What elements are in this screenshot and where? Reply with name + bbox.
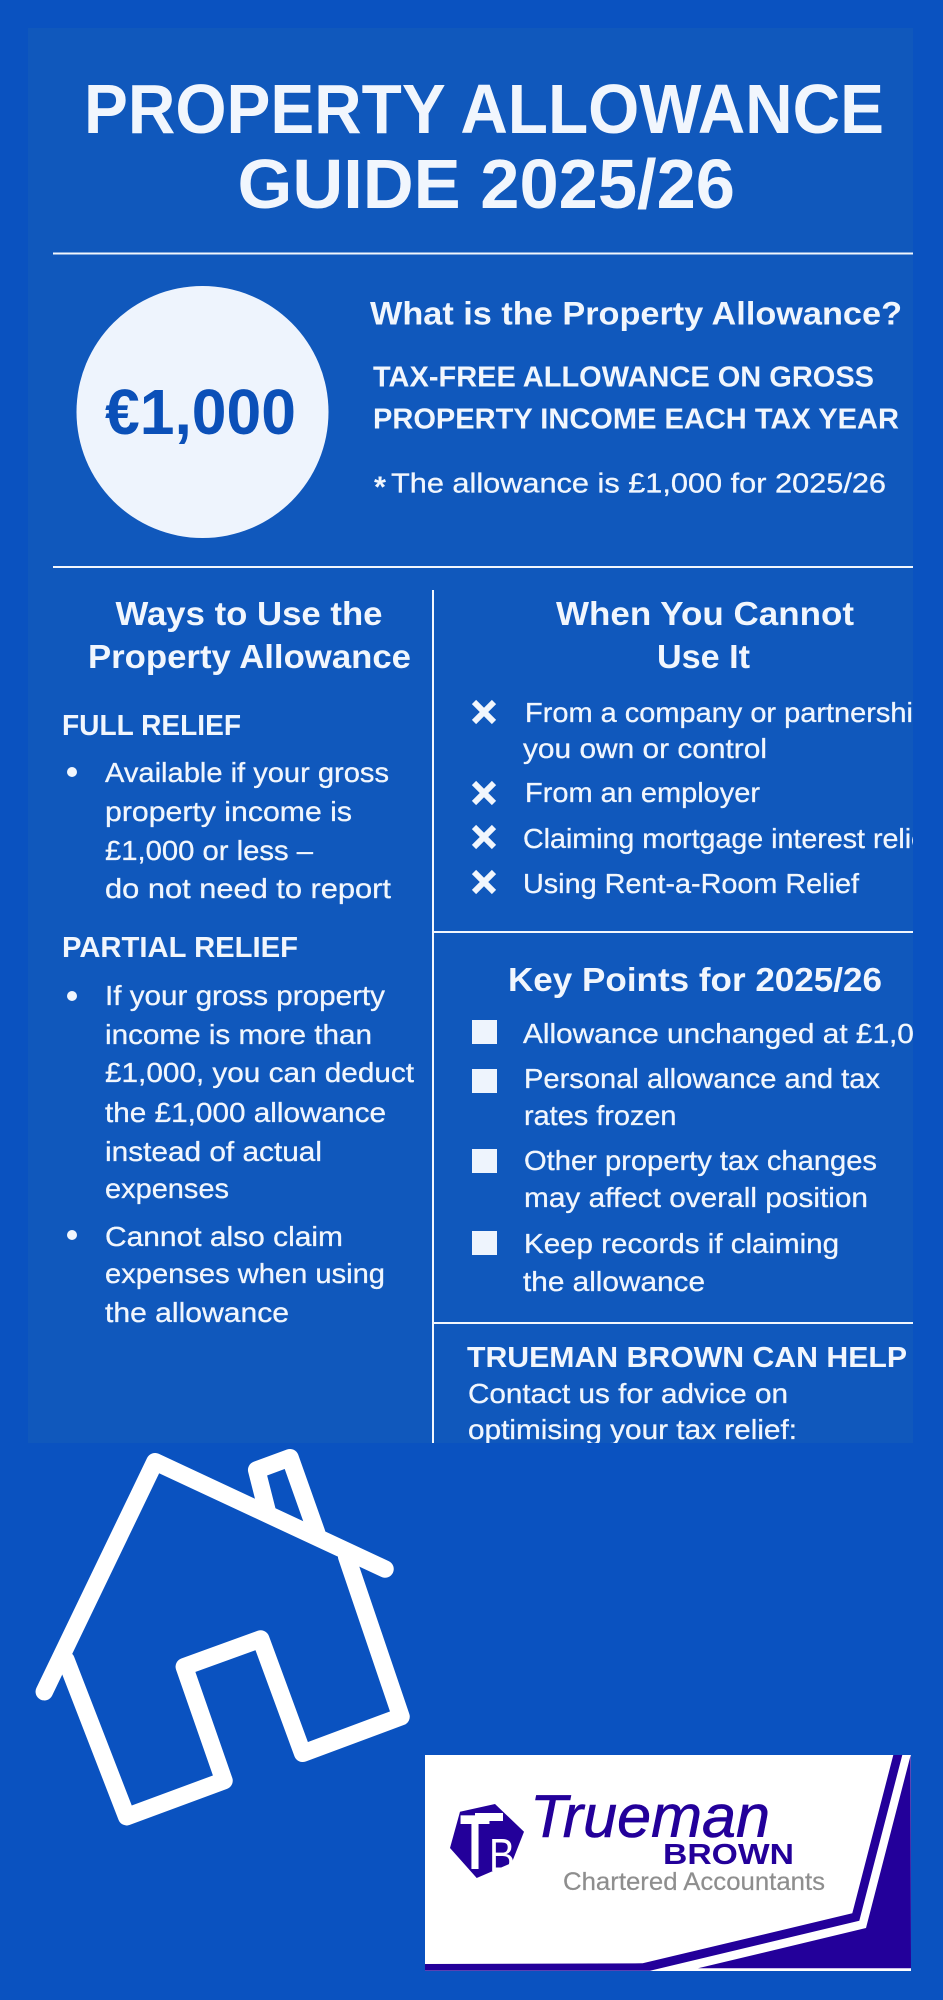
- heading: ways to use: Ways to Use the: [116, 595, 382, 632]
- title: [88, 84, 882, 210]
- list: exclusions: Claiming mortgage interest relief: [523, 823, 935, 854]
- heading: when you cannot use it: [556, 601, 854, 668]
- note: allowance amount: *: [374, 471, 386, 504]
- text: definition: PROPERTY INCOME EACH TAX YEAR: [373, 404, 899, 436]
- list: full relief: property income is: [105, 796, 352, 827]
- heading: when you cannot use it: Use It: [657, 638, 750, 675]
- list: partial relief: If your gross property: [105, 980, 385, 1011]
- logo: trueman brown chartered accountants: [425, 1755, 911, 1971]
- logo: trueman brown chartered accountants: T: [460, 1798, 490, 1886]
- callout: trueman brown can help: optimising your tax relief:: [468, 1414, 797, 1445]
- list: key points: Keep records if claiming: [524, 1228, 839, 1259]
- text: definition: [373, 366, 898, 429]
- list: partial relief: the allowance: [105, 1297, 289, 1328]
- section: what is the property allowance: [370, 296, 902, 504]
- panel: when you cannot use it: [474, 595, 935, 899]
- icons: square bullets: [472, 1020, 497, 1255]
- logo: trueman brown chartered accountants: BROWN: [663, 1839, 794, 1871]
- list: exclusions: From a company or partnership: [525, 697, 929, 728]
- list: full relief: £1,000 or less –: [105, 835, 313, 866]
- list: full relief: do not need to report: [105, 873, 391, 904]
- list: partial relief: income is more than: [105, 1019, 372, 1050]
- title: PROPERTY ALLOWANCE: [84, 70, 884, 148]
- list: partial relief: instead of actual: [105, 1136, 322, 1167]
- logo: trueman brown chartered accountants: Chartered Accountants: [563, 1868, 825, 1896]
- list: exclusions: Using Rent-a-Room Relief: [523, 868, 859, 899]
- heading: what is the property allowance: What is the Property Allowance?: [370, 296, 902, 332]
- list: key points: Personal allowance and tax: [524, 1063, 880, 1094]
- list: partial relief: £1,000, you can deduct: [105, 1057, 414, 1088]
- list: key points: may affect overall position: [524, 1182, 868, 1213]
- icons: cross marks: [474, 702, 494, 892]
- panel: ways to use the property allowance: [62, 595, 414, 1328]
- list: full relief: [67, 757, 391, 904]
- list: key points: Allowance unchanged at £1,000: [523, 1018, 943, 1049]
- list: key points: Other property tax changes: [524, 1145, 877, 1176]
- panel: key points: [472, 961, 943, 1297]
- list: exclusions: you own or control: [523, 733, 767, 764]
- list: full relief: Available if your gross: [105, 757, 389, 788]
- list: partial relief: Cannot also claim: [105, 1221, 343, 1252]
- title: GUIDE 2025/26: [238, 145, 735, 223]
- logo: trueman brown chartered accountants: B: [489, 1829, 515, 1881]
- list: key points: [522, 1022, 913, 1292]
- subheading: full relief: FULL RELIEF: [62, 710, 241, 742]
- heading: when you cannot use it: When You Cannot: [556, 595, 854, 632]
- note: allowance amount: The allowance is £1,000 for 2025/26: [391, 468, 886, 498]
- callout: trueman brown can help: TRUEMAN BROWN CAN HELP: [467, 1342, 907, 1374]
- panel: main content: [28, 28, 943, 1445]
- list: key points: the allowance: [523, 1266, 705, 1297]
- icon: house: [44, 1458, 401, 1817]
- heading: key points: Key Points for 2025/26: [508, 961, 882, 998]
- callout: trueman brown can help: [467, 1342, 907, 1445]
- list: partial relief: expenses: [105, 1173, 229, 1204]
- list: exclusions: From an employer: [525, 777, 760, 808]
- list: partial relief: the £1,000 allowance: [105, 1097, 386, 1128]
- logo: trueman brown chartered accountants: Trueman: [530, 1783, 770, 1850]
- list: partial relief: expenses when using: [105, 1258, 385, 1289]
- subheading: partial relief: PARTIAL RELIEF: [62, 932, 298, 964]
- heading: ways to use: Property Allowance: [88, 638, 411, 675]
- badge: allowance amount: [76, 286, 328, 538]
- text: definition: TAX-FREE ALLOWANCE ON GROSS: [373, 362, 874, 394]
- list: exclusions: [523, 697, 935, 899]
- badge: allowance amount: €1,000: [105, 376, 296, 448]
- list: partial relief: [67, 980, 414, 1328]
- callout: trueman brown can help: Contact us for advice on: [468, 1378, 788, 1409]
- heading: ways to use: [88, 595, 411, 675]
- list: key points: rates frozen: [524, 1100, 676, 1131]
